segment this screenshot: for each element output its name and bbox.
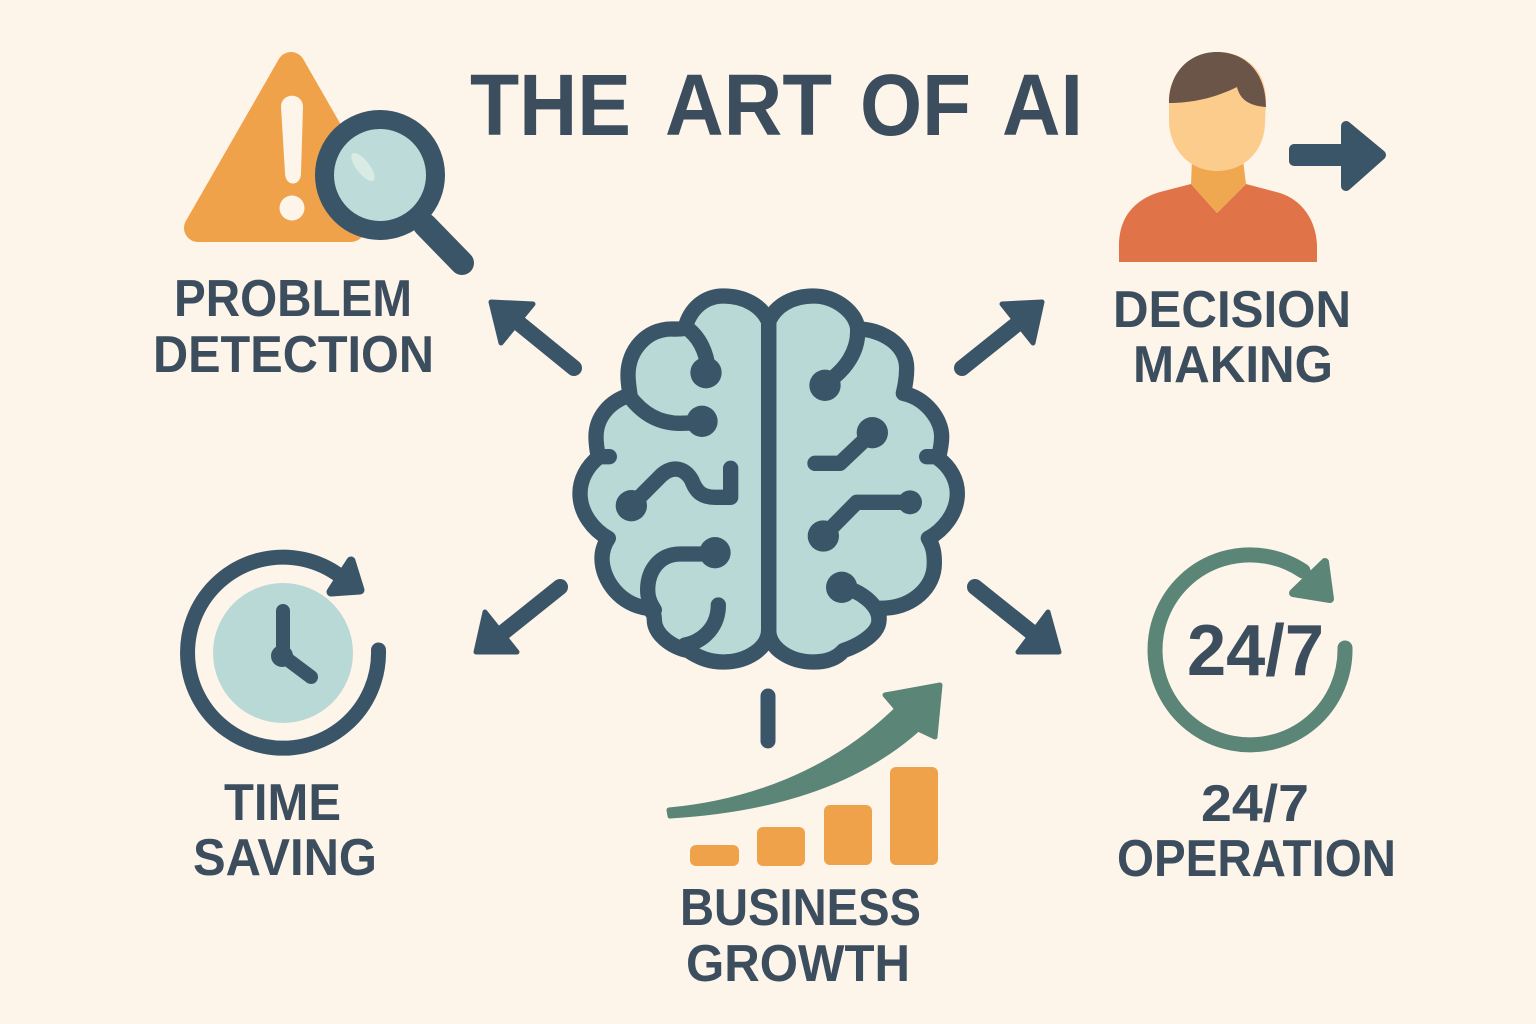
face xyxy=(1169,52,1266,171)
label: decision making: DECISION xyxy=(1113,281,1351,339)
left hemisphere xyxy=(580,296,769,662)
title: ART xyxy=(665,57,832,154)
label: time saving: SAVING xyxy=(193,829,377,887)
right hemisphere xyxy=(769,296,957,662)
icon: 24/7 circular arrow xyxy=(1155,555,1345,745)
label: business growth: BUSINESS xyxy=(680,879,921,937)
arrow xyxy=(1294,126,1381,186)
label: time saving xyxy=(193,774,377,887)
arrow: to business growth xyxy=(760,696,776,741)
right circuits xyxy=(808,330,938,620)
label: problem detection: PROBLEM xyxy=(174,270,412,328)
rising arrow xyxy=(669,685,940,816)
icon: person with arrow xyxy=(1119,52,1381,262)
label: 24/7 operation: 24/7 xyxy=(1201,775,1309,833)
title: THE xyxy=(470,57,631,154)
label: problem detection: DETECTION xyxy=(153,326,434,384)
icon: warning triangle with magnifying glass xyxy=(198,66,462,263)
label: business growth xyxy=(680,879,921,993)
hair xyxy=(1169,52,1266,107)
label: problem detection xyxy=(153,270,434,384)
title: OF xyxy=(860,57,971,154)
center divider xyxy=(746,317,792,642)
icon: clock with circular arrow xyxy=(188,557,379,748)
label: decision making xyxy=(1113,281,1351,394)
arrow: to decision making xyxy=(962,302,1042,368)
exclamation mark xyxy=(280,96,304,220)
icon: brain with circuits xyxy=(580,296,957,662)
label: 24/7 operation: OPERATION xyxy=(1117,830,1396,888)
arrow: to 24/7 operation xyxy=(975,587,1059,652)
arrow: to problem detection xyxy=(491,302,574,368)
warning triangle xyxy=(198,66,351,228)
clock face xyxy=(213,583,353,723)
clock hands xyxy=(283,611,311,677)
label: 24/7 operation xyxy=(1117,775,1396,888)
shirt xyxy=(1119,184,1317,262)
label: time saving: TIME xyxy=(224,774,341,832)
label: decision making: MAKING xyxy=(1133,336,1333,394)
left circuits xyxy=(598,327,731,645)
bars xyxy=(690,767,938,866)
icon: growth chart xyxy=(669,685,940,866)
magnifying glass xyxy=(324,120,462,263)
title xyxy=(470,57,1083,154)
label: business growth: GROWTH xyxy=(686,935,910,993)
24/7 icon text: 24/7 xyxy=(1187,611,1324,691)
circular arrow xyxy=(188,557,379,748)
arrow: to time saving xyxy=(476,587,560,652)
title: AI xyxy=(1002,57,1083,154)
neck xyxy=(1191,160,1246,213)
